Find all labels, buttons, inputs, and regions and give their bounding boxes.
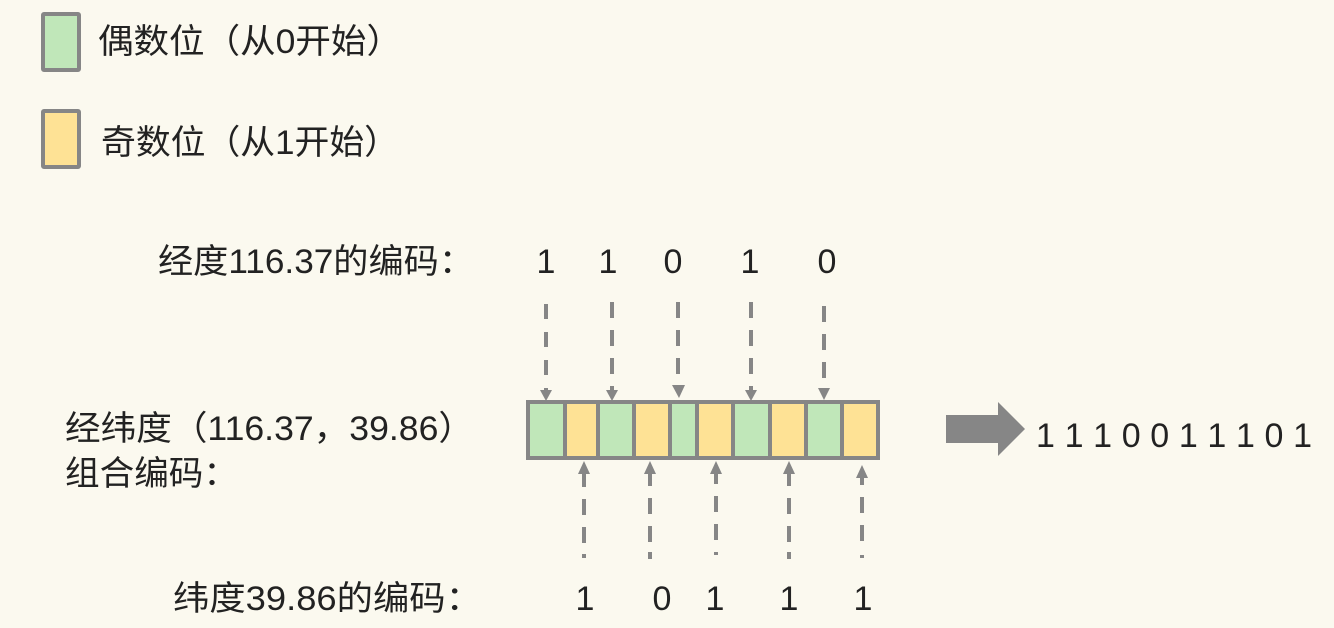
swatch: yellow xyxy=(43,111,79,167)
latitude bits xyxy=(576,580,872,618)
combined result bits: 1 1 1 0 0 1 1 1 0 1 xyxy=(1036,417,1312,455)
longitude bits: 0 xyxy=(818,243,836,281)
longitude label: 经度116.37的编码： xyxy=(158,243,474,281)
latitude label: 纬度39.86的编码： xyxy=(173,580,482,618)
longitude bits xyxy=(537,243,836,281)
legend label: even: 偶数位（从0开始） xyxy=(98,23,402,61)
arrows: latitude bits up into bar xyxy=(578,461,868,559)
longitude bits: 0 xyxy=(664,243,682,281)
combined label xyxy=(65,410,474,493)
longitude bits: 1 xyxy=(599,243,617,281)
longitude bits: 1 xyxy=(537,243,555,281)
big arrow xyxy=(946,402,1025,456)
legend label: odd: 奇数位（从1开始） xyxy=(101,124,399,162)
legend: even bits xyxy=(43,14,402,70)
arrows: longitude bits down into bar xyxy=(540,302,830,401)
latitude bits: 1 xyxy=(576,580,594,618)
longitude bits: 1 xyxy=(741,243,759,281)
combined label: 组合编码： xyxy=(65,455,238,493)
latitude bits: 1 xyxy=(854,580,872,618)
latitude bits: 1 xyxy=(780,580,798,618)
swatch: green xyxy=(43,14,79,70)
combined label: 经纬度（116.37，39.86） xyxy=(65,410,474,448)
combined bit bar xyxy=(528,402,878,458)
legend: odd bits xyxy=(43,111,399,167)
latitude bits: 1 xyxy=(706,580,724,618)
latitude bits: 0 xyxy=(653,580,671,618)
